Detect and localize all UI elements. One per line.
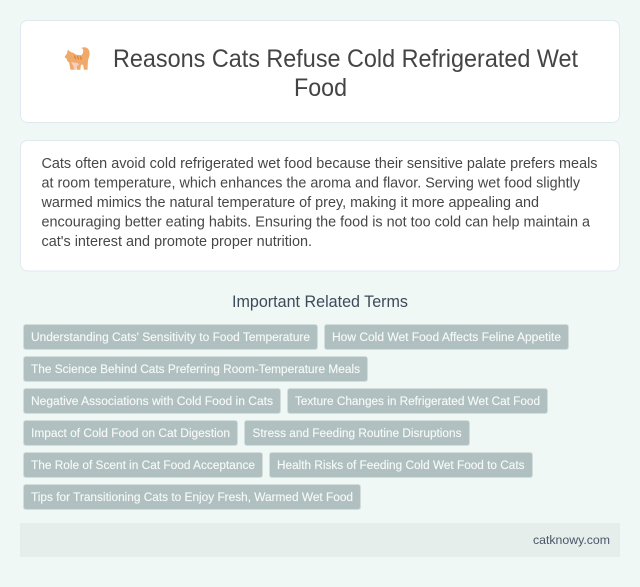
tag: The Science Behind Cats Preferring Room-Temperature Meals bbox=[31, 362, 360, 376]
tag bbox=[244, 420, 470, 446]
tag bbox=[24, 388, 280, 414]
tag: Understanding Cats' Sensitivity to Food Temperature bbox=[31, 330, 310, 344]
icon: cat bbox=[65, 47, 90, 70]
footer source text: catknowy.com bbox=[533, 533, 610, 547]
description text: encouraging better eating habits. Ensuring the food is not too cold can help maintain a bbox=[42, 214, 591, 230]
description text: warmed mimics the natural temperature of prey, making it more appealing and bbox=[41, 195, 539, 211]
tag bbox=[24, 420, 238, 446]
tag: Tips for Transitioning Cats to Enjoy Fresh, Warmed Wet Food bbox=[31, 490, 353, 504]
tag bbox=[24, 324, 318, 350]
description text: cat's interest and promote proper nutrition. bbox=[42, 234, 312, 250]
tag: Impact of Cold Food on Cat Digestion bbox=[31, 426, 230, 440]
tag bbox=[24, 452, 262, 478]
tag bbox=[324, 324, 568, 350]
tag: The Role of Scent in Cat Food Acceptance bbox=[31, 458, 255, 472]
tag bbox=[288, 388, 548, 414]
title: Food bbox=[294, 75, 347, 102]
tag: Negative Associations with Cold Food in Cats bbox=[31, 394, 273, 408]
tag: Stress and Feeding Routine Disruptions bbox=[252, 426, 462, 440]
tag: How Cold Wet Food Affects Feline Appetite bbox=[332, 330, 561, 344]
description text bbox=[41, 156, 597, 250]
tag bbox=[270, 452, 532, 478]
heading: related terms: Important Related Terms bbox=[232, 293, 408, 311]
title: Reasons Cats Refuse Cold Refrigerated Wet bbox=[113, 46, 578, 73]
description text: at room temperature, which enhances the aroma and flavor. Serving wet food slightly bbox=[42, 176, 581, 192]
tag bbox=[24, 484, 360, 510]
description text: Cats often avoid cold refrigerated wet food because their sensitive palate prefers meals bbox=[42, 156, 598, 172]
footer bbox=[20, 523, 620, 557]
tag list bbox=[24, 324, 568, 510]
tag bbox=[24, 356, 368, 382]
title bbox=[113, 46, 578, 102]
panel: title card bbox=[20, 20, 620, 122]
tag: Health Risks of Feeding Cold Wet Food to Cats bbox=[277, 458, 524, 472]
panel: description bbox=[20, 140, 620, 271]
tag: Texture Changes in Refrigerated Wet Cat Food bbox=[295, 394, 540, 408]
